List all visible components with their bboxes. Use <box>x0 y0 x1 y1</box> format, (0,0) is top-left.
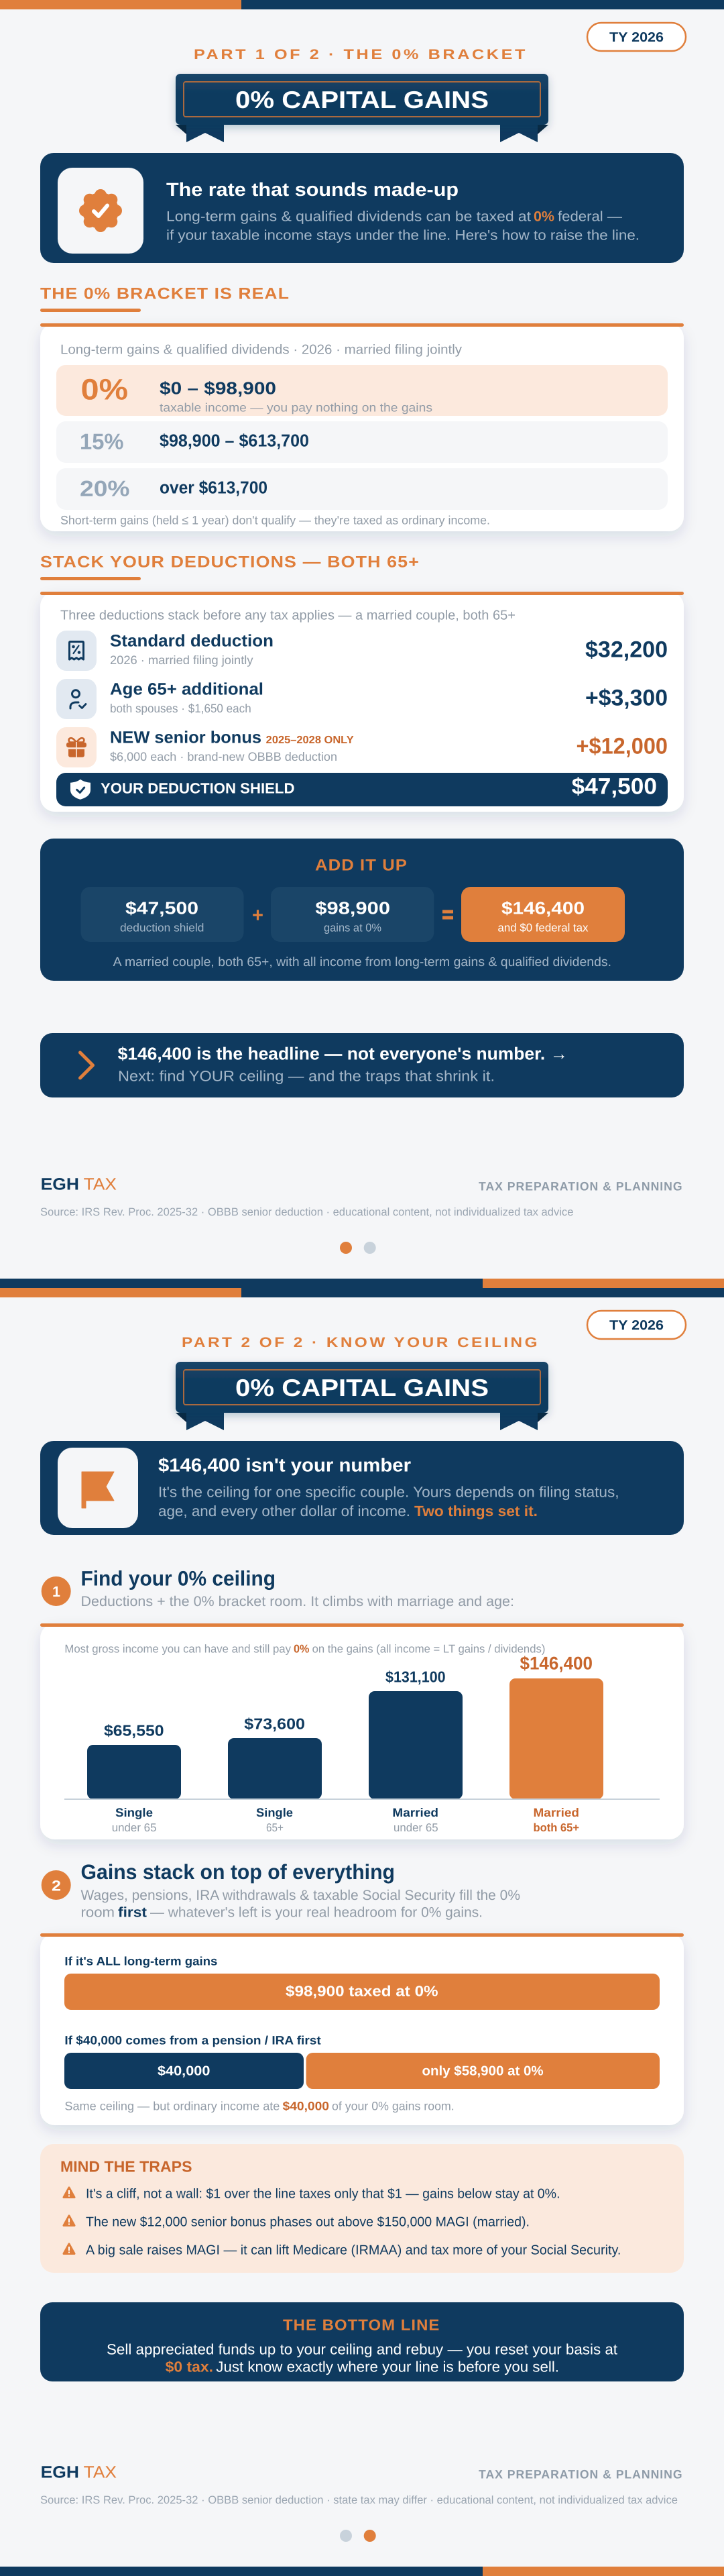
step 1 heading <box>42 1566 514 1609</box>
section heading: stack your deductions <box>40 553 420 580</box>
hero panel: the rate that sounds made-up <box>40 153 684 263</box>
row: 20% bracket: 20% <box>80 476 130 500</box>
bar: single 65+ <box>228 1715 322 1834</box>
hero body text: federal — <box>558 209 622 224</box>
panel: add it up <box>40 839 684 981</box>
tax year pill: part 2 <box>587 1311 686 1339</box>
pagination dots: part 1 <box>340 1242 376 1254</box>
stacking note: Same ceiling — but ordinary income ate <box>64 2100 280 2113</box>
bar: married both 65+: Married <box>534 1806 579 1819</box>
bottom accent bar: part 2 <box>0 2567 724 2576</box>
bar: single under 65: $65,550 <box>104 1722 164 1739</box>
icon: check badge <box>58 168 143 254</box>
icon: warning <box>64 2216 74 2226</box>
bar: married under 65: Married <box>392 1806 438 1819</box>
row: age 65+ additional: both spouses · $1,650 each <box>110 702 251 715</box>
row: 0% bracket: 0% <box>80 373 128 407</box>
row: 20% bracket <box>56 468 668 510</box>
chart caption: on the gains (all income = LT gains / dividends) <box>312 1643 545 1656</box>
top accent bar: part 2 <box>0 1288 724 1297</box>
equation term: gains at 0% <box>271 887 434 942</box>
hero body text: Two things set it. <box>414 1503 538 1519</box>
icon: warning <box>64 2188 74 2198</box>
traps heading: MIND THE TRAPS <box>60 2158 192 2176</box>
stacking note <box>64 2100 455 2113</box>
tax year pill: part 1 <box>587 23 686 51</box>
step 2 heading: first <box>118 1905 147 1921</box>
title ribbon banner: part 1: 0% CAPITAL GAINS <box>235 86 489 113</box>
step 1 heading: Find your 0% ceiling <box>80 1566 276 1590</box>
add it up note: A married couple, both 65+, with all income from long-term gains & qualified dividends. <box>113 955 611 969</box>
row: 0% bracket: taxable income — you pay nothing on the gains <box>160 401 432 415</box>
scenario: pension first: only $58,900 at 0% <box>422 2064 544 2079</box>
hero heading: The rate that sounds made-up <box>166 179 459 200</box>
bottom accent bar: part 1 <box>0 1279 724 1288</box>
footer: part 1: Source: IRS Rev. Proc. 2025-32 · OBBB senior deduction · educational content, not individualized tax advice <box>40 1206 573 1218</box>
scenario: all long-term gains: $98,900 taxed at 0% <box>286 1982 438 1999</box>
trap 2: The new $12,000 senior bonus phases out above $150,000 MAGI (married). <box>86 2215 530 2230</box>
footer: part 1: TAX <box>84 1175 117 1193</box>
bar: single under 65 <box>87 1722 181 1834</box>
step 2 heading <box>42 1860 520 1921</box>
icon: shield <box>70 780 90 800</box>
row: 0% bracket: $0 – $98,900 <box>160 378 276 398</box>
scenario: pension first: If $40,000 comes from a pension / IRA first <box>64 2034 321 2047</box>
bar: single under 65: under 65 <box>112 1821 157 1834</box>
equation term: gains at 0%: gains at 0% <box>324 922 381 934</box>
chart caption <box>64 1643 545 1656</box>
trap 1: It's a cliff, not a wall: $1 over the line taxes only that $1 — gains below stay at 0%. <box>86 2187 560 2202</box>
stacking note: $40,000 <box>283 2100 329 2113</box>
hero body text: It's the ceiling for one specific couple. Yours depends on filing status, <box>158 1484 619 1501</box>
row: 15% bracket: 15% <box>80 429 123 453</box>
bottom line heading: THE BOTTOM LINE <box>283 2316 440 2334</box>
row: age 65+ additional: +$3,300 <box>585 685 668 710</box>
icon: warning <box>64 2244 74 2254</box>
bar: married under 65: under 65 <box>394 1821 438 1834</box>
deductions caption: Three deductions stack before any tax applies — a married couple, both 65+ <box>60 608 516 623</box>
hero body text: Long-term gains & qualified dividends can be taxed at <box>166 209 531 224</box>
pagination dots: part 2 <box>340 2530 376 2542</box>
row: standard deduction: 2026 · married filing jointly <box>110 653 253 667</box>
footer: part 1: TAX PREPARATION & PLANNING <box>479 1179 683 1193</box>
row: new senior bonus <box>56 727 668 767</box>
hero body text: 0% <box>534 209 554 224</box>
stacking note: of your 0% gains room. <box>332 2100 455 2113</box>
row: new senior bonus: $6,000 each · brand-new OBBB deduction <box>110 750 337 763</box>
icon: chevron arrow <box>80 1053 93 1078</box>
total bar: your deduction shield: YOUR DEDUCTION SHIELD <box>101 780 295 797</box>
total bar: your deduction shield: $47,500 <box>572 773 657 799</box>
chart caption: Most gross income you can have and still pay <box>64 1643 291 1656</box>
bar: married both 65+: both 65+ <box>534 1821 579 1834</box>
equation result: and $0 federal tax <box>497 922 589 934</box>
trap 3: A big sale raises MAGI — it can lift Medicare (IRMAA) and tax more of your Social Security. <box>86 2243 621 2258</box>
total bar: your deduction shield <box>56 773 668 806</box>
bracket table caption: Long-term gains & qualified dividends · 2026 · married filing jointly <box>60 343 462 358</box>
step 1 heading: 1 <box>52 1583 60 1600</box>
step 2 heading: Gains stack on top of everything <box>80 1860 395 1884</box>
row: new senior bonus: NEW senior bonus <box>110 729 261 747</box>
scenario: pension first: $40,000 <box>158 2064 210 2079</box>
step 2 heading: — whatever's left is your real headroom for 0% gains. <box>150 1905 483 1921</box>
title ribbon banner: part 2: 0% CAPITAL GAINS <box>235 1374 489 1401</box>
scenario: all long-term gains <box>64 1955 660 2010</box>
section heading: stack your deductions: STACK YOUR DEDUCTIONS — BOTH 65+ <box>40 553 420 572</box>
bottom line text <box>107 2341 617 2375</box>
footer: part 2: TAX <box>84 2463 117 2481</box>
bar: single under 65: Single <box>115 1806 153 1819</box>
bar: married both 65+ <box>509 1654 603 1834</box>
tax year pill: part 1: TY 2026 <box>609 30 664 45</box>
footer: part 1: EGH <box>41 1175 79 1193</box>
panel: deductions <box>40 592 684 812</box>
equation term: deduction shield <box>80 887 244 942</box>
bar: single 65+: Single <box>256 1806 293 1819</box>
row: age 65+ additional: Age 65+ additional <box>110 680 263 699</box>
row: new senior bonus: 2025–2028 ONLY <box>266 735 354 746</box>
row: 0% bracket <box>56 365 668 416</box>
row: standard deduction: Standard deduction <box>110 632 274 651</box>
row: standard deduction: $32,200 <box>585 637 668 662</box>
equation term: deduction shield: $47,500 <box>125 898 198 918</box>
section heading: the 0% bracket is real <box>40 285 290 312</box>
footer: part 2 <box>40 2463 683 2506</box>
step 2 heading: Wages, pensions, IRA withdrawals & taxable Social Security fill the 0% <box>80 1888 520 1903</box>
equation result <box>461 887 625 942</box>
bottom line text: $0 tax. <box>166 2358 213 2375</box>
teaser headline: $146,400 is the headline — not everyone's number. → <box>118 1043 568 1063</box>
row: 15% bracket <box>56 421 668 463</box>
step 2 heading: 2 <box>52 1878 61 1894</box>
equals sign <box>442 910 453 919</box>
title ribbon banner: part 2 <box>176 1362 548 1430</box>
footer: part 2: Source: IRS Rev. Proc. 2025-32 · OBBB senior deduction · state tax may differ · educational content, not individualized tax advice <box>40 2494 678 2506</box>
eyebrow: part 1: PART 1 OF 2 · THE 0% BRACKET <box>194 47 528 62</box>
row: standard deduction <box>56 631 668 671</box>
footer: part 2: EGH <box>41 2463 79 2481</box>
icon: receipt <box>56 631 97 671</box>
chart caption: 0% <box>294 1643 309 1656</box>
bar: married under 65 <box>369 1668 463 1834</box>
step 2 heading: room <box>80 1905 115 1921</box>
top accent bar: part 1 <box>0 0 724 9</box>
panel: the bottom line <box>40 2302 684 2381</box>
row: 15% bracket: $98,900 – $613,700 <box>160 431 309 451</box>
footer: part 2: TAX PREPARATION & PLANNING <box>479 2467 683 2481</box>
hero body text <box>158 1484 619 1519</box>
tax year pill: part 2: TY 2026 <box>609 1318 664 1333</box>
equation term: deduction shield: deduction shield <box>120 922 204 934</box>
panel: bracket table <box>40 323 684 531</box>
icon: person with check <box>56 679 97 719</box>
panel: ceiling bar chart <box>40 1623 684 1839</box>
icon: flag <box>58 1448 138 1528</box>
step 1 heading: Deductions + the 0% bracket room. It climbs with marriage and age: <box>80 1594 514 1609</box>
row: 20% bracket: over $613,700 <box>160 478 267 498</box>
hero body text: if your taxable income stays under the line. Here's how to raise the line. <box>166 228 640 243</box>
icon: gift <box>56 727 97 767</box>
bottom line text: Just know exactly where your line is before you sell. <box>216 2358 559 2375</box>
panel: mind the traps <box>40 2144 684 2273</box>
hero body text: age, and every other dollar of income. <box>158 1503 410 1519</box>
section heading: the 0% bracket is real: THE 0% BRACKET IS REAL <box>40 285 290 303</box>
panel: next teaser <box>40 1033 684 1097</box>
title ribbon banner: part 1 <box>176 74 548 142</box>
equation result: $146,400 <box>501 898 585 918</box>
bar: married under 65: $131,100 <box>385 1668 446 1686</box>
bar: single 65+: 65+ <box>266 1821 284 1834</box>
bar: married both 65+: $146,400 <box>520 1654 593 1674</box>
equation term: gains at 0%: $98,900 <box>315 898 390 918</box>
bottom line text: Sell appreciated funds up to your ceiling and rebuy — you reset your basis at <box>107 2341 617 2358</box>
footer: part 1 <box>40 1175 683 1218</box>
add it up heading: ADD IT UP <box>315 857 408 875</box>
teaser subline: Next: find YOUR ceiling — and the traps that shrink it. <box>118 1068 495 1085</box>
panel: stacking bars <box>40 1933 684 2125</box>
plus sign: + <box>252 904 263 926</box>
row: age 65+ additional <box>56 679 668 719</box>
short-term note: Short-term gains (held ≤ 1 year) don't qualify — they're taxed as ordinary income. <box>60 514 490 527</box>
hero panel: $146,400 isn't your number <box>40 1441 684 1535</box>
scenario: pension first <box>64 2034 660 2089</box>
row: new senior bonus: +$12,000 <box>577 733 668 759</box>
eyebrow: part 2: PART 2 OF 2 · KNOW YOUR CEILING <box>182 1335 540 1350</box>
hero heading: $146,400 isn't your number <box>158 1454 411 1475</box>
scenario: all long-term gains: If it's ALL long-term gains <box>64 1955 217 1968</box>
hero body text <box>166 209 640 243</box>
bar: single 65+: $73,600 <box>244 1715 305 1733</box>
